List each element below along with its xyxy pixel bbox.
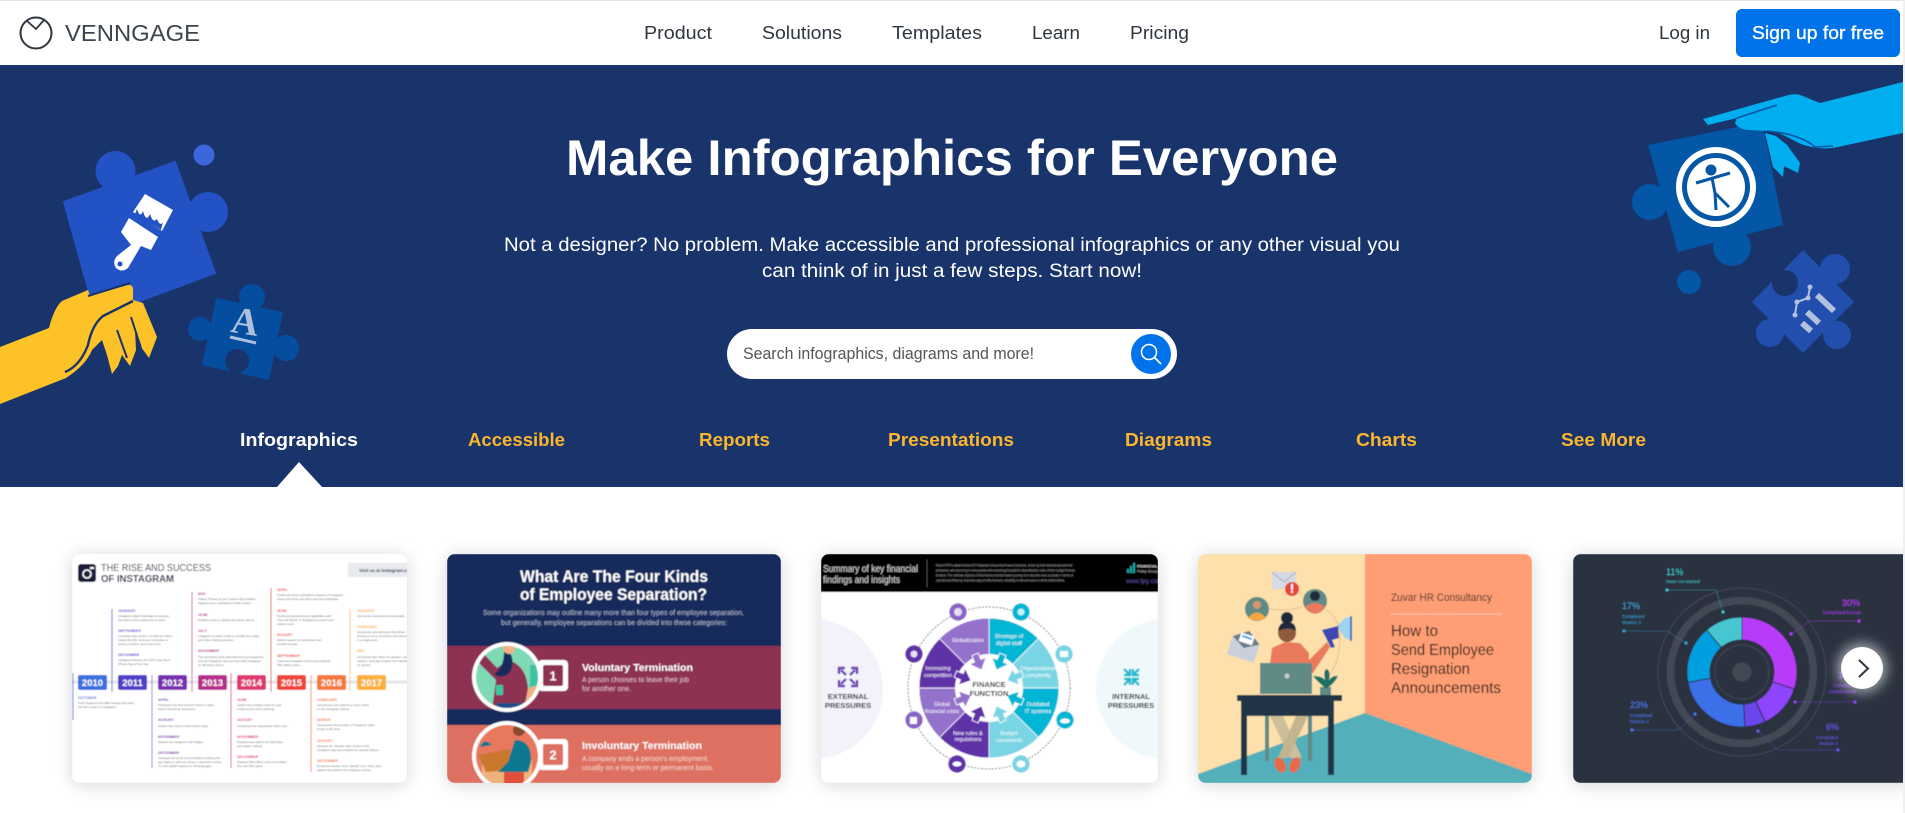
timeline events: MARCH	[317, 718, 331, 722]
internal pressures: INTERNAL	[1112, 692, 1150, 701]
band heading and text: usually on a long-term or permanent basis.	[582, 765, 714, 772]
hand: cyan	[1703, 82, 1903, 177]
finance wheel: FINANCE	[972, 680, 1006, 689]
card header: Summary of key financial	[823, 563, 918, 575]
timeline events: Announced new options to count views	[317, 703, 369, 707]
label: 17%	[1622, 601, 1688, 644]
category tabs: Reports	[699, 430, 770, 450]
left illustration: puzzle with brush and hand	[0, 144, 228, 404]
band heading and text: Voluntary Termination	[582, 662, 693, 674]
wheel labels: Global	[934, 702, 950, 708]
timeline events: portrait formats.	[277, 642, 298, 646]
sign up button: Sign up for free	[1752, 23, 1884, 43]
puzzle piece: letter A: A	[228, 299, 263, 345]
illustration: megaphone	[1322, 616, 1352, 648]
category tabs: Accessible	[468, 430, 565, 450]
puzzle piece: brush	[64, 144, 228, 317]
ring icons	[905, 603, 1074, 773]
timeline events: AUGUST	[277, 633, 293, 637]
card header: Policy Group	[1137, 570, 1158, 574]
label: 17%: 17%	[1622, 601, 1640, 611]
timeline events: JANUARY	[357, 609, 375, 613]
icon: arrows out	[839, 668, 857, 686]
category tabs	[240, 430, 1646, 450]
menu links: Product	[644, 23, 712, 43]
card text: Announcements	[1391, 680, 1501, 697]
wheel labels: digital staff	[996, 641, 1023, 647]
wheel labels: New rules &	[953, 731, 983, 737]
timeline events: explore tools.	[277, 622, 295, 626]
timeline events: instant tilt shift, improved resolution of	[118, 638, 168, 642]
timeline events: APRIL	[158, 698, 170, 702]
finance wheel: FUNCTION	[970, 689, 1008, 698]
card intro	[483, 610, 744, 627]
wheel labels: complexity	[1025, 673, 1051, 679]
timeline events: Enhanced stories more, started 'Live' users, and	[317, 764, 381, 768]
card header: pressures, are improving in many areas and exceeding forecast for diversification rates of their budget finance	[936, 568, 1075, 572]
timeline events: into the Instagram app and launched Instagram	[198, 659, 261, 663]
wheel labels: constraints	[996, 738, 1023, 744]
timeline events: Launched app version 2.0 with live filters,	[118, 634, 173, 638]
label: 6%: Completed	[1816, 735, 1838, 740]
search bar: Search infographics, diagrams and more!	[743, 345, 1034, 363]
timeline events: APRIL	[277, 588, 289, 592]
timeline events: length to 60 secs.	[317, 727, 341, 731]
band heading and text	[582, 740, 714, 772]
wheel labels: Outdated	[1027, 702, 1049, 708]
card header: Recent FPG's latest Global CFO Research shows that finance functions, driven by both internal and external	[936, 564, 1072, 568]
timeline events: and caption editing.	[237, 744, 263, 748]
illustration: person at desk	[1237, 612, 1342, 775]
label: 17%: Completed	[1622, 614, 1645, 619]
external pressures: EXTERNAL	[828, 692, 869, 701]
card title	[101, 563, 211, 585]
timeline events: NOVEMBER	[237, 735, 259, 739]
label: 6%: Module 1	[1819, 741, 1838, 746]
timeline events: before Facebook acquired it.	[158, 707, 196, 711]
timeline events: FEBRUARY	[317, 698, 338, 702]
label: 30%: 30%	[1842, 598, 1860, 608]
illustration: avatars and dashed links	[1245, 589, 1340, 675]
timeline years: 2010	[82, 678, 103, 689]
illustration: person with box	[471, 720, 540, 783]
number tag 2	[538, 739, 568, 770]
band heading and text: A company ends a person's employment,	[582, 756, 709, 763]
timeline events: MAY	[357, 649, 365, 653]
timeline events: added new stickers for Instagram stories.	[317, 768, 372, 772]
timeline events: Attained 300 million users and added	[237, 760, 287, 764]
timeline events: the first version of Instagram.	[78, 705, 117, 709]
sign up button	[1736, 9, 1900, 57]
search button	[1131, 334, 1171, 374]
card header: function. The ultimate objective of this finance transformation journey is to become more accurate in terms of	[936, 574, 1073, 578]
timeline events: Added support for landscape and	[277, 638, 322, 642]
category tabs: See More	[1561, 430, 1646, 450]
timeline events: 400 million users.	[277, 663, 301, 667]
external pressures: PRESSURES	[825, 701, 871, 710]
icon: accessibility	[1676, 147, 1756, 227]
label: 6%	[1756, 722, 1840, 752]
card header: www.fpg.com	[1125, 579, 1162, 585]
timeline events: JULY	[198, 629, 208, 633]
timeline years: 2015	[281, 678, 303, 689]
icon: arrows in	[1124, 669, 1139, 685]
timeline events: Live stories launched internationally.	[357, 614, 405, 618]
timeline events: FEBRUARY	[357, 625, 378, 629]
timeline events: Started the Instagram web widget.	[158, 740, 204, 744]
card title: THE RISE AND SUCCESS	[101, 563, 211, 574]
label: 23%: Completed	[1630, 713, 1653, 718]
category tabs: Charts	[1356, 430, 1417, 450]
timeline events: "See the World" in Singapore's search and	[277, 618, 334, 622]
wheel labels: competition	[924, 673, 952, 679]
timeline events: Introduced carousel post that allows	[357, 630, 405, 634]
wheel labels	[924, 634, 1056, 744]
timeline events: SEPTEMBER	[118, 629, 141, 633]
menu links: Templates	[892, 23, 982, 43]
wheel labels: Budget	[1000, 731, 1018, 737]
card header: findings and insights	[823, 574, 900, 586]
label: 30%: Completed Course	[1823, 610, 1861, 615]
timeline events: Introduced the first Android version 6 days	[158, 703, 215, 707]
puzzle piece: accessibility	[1632, 122, 1783, 294]
wheel labels: Organizational	[1020, 666, 1056, 672]
website tag: Visit us at instagram.com	[359, 568, 413, 573]
wheel labels: regulations	[955, 737, 982, 743]
timeline events: and video sharing process.	[198, 638, 234, 642]
timeline events: along with three new filters and long hashtags.	[277, 597, 339, 601]
hero subtitle	[504, 234, 1400, 282]
timeline events: AUGUST	[317, 739, 333, 743]
band heading and text: A person chooses to leave their job	[582, 677, 689, 684]
donut chart	[1658, 588, 1826, 756]
timeline events: 3.2 and added support for 25 languages.	[158, 764, 212, 768]
timeline events: five new filter types.	[237, 764, 264, 768]
timeline events: Adopted the 'Stories' slow motion in the	[317, 744, 370, 748]
hand: yellow	[0, 283, 157, 404]
card: Instagram timeline	[72, 554, 413, 783]
timeline events: AUGUST	[237, 718, 253, 722]
timeline events: DECEMBER	[237, 755, 258, 759]
card title	[520, 568, 708, 604]
right illustration: accessibility puzzle and hand	[1632, 82, 1903, 294]
wheel labels: Shortage of	[995, 634, 1024, 640]
card: donut chart dashboard	[1573, 554, 1905, 783]
timeline events: Instagram app and emptied its camera feature.	[317, 748, 379, 752]
timeline events: JANUARY	[118, 609, 136, 613]
timeline years: 2013	[202, 678, 223, 689]
timeline events: for Windows phone.	[198, 663, 225, 667]
timeline events	[78, 588, 411, 772]
card text: How to	[1391, 623, 1438, 640]
timeline events: Instagram became the iOS 5 App Store	[118, 658, 171, 662]
timeline years	[73, 588, 386, 772]
puzzle piece: chart	[1752, 250, 1854, 353]
timeline events: NOVEMBER	[198, 649, 220, 653]
logo	[20, 18, 200, 48]
menu links: Log in	[1659, 23, 1710, 43]
timeline events: Retrieved advertisement capabilities with	[277, 614, 332, 618]
hero subtitle: can think of in just a few steps. Start now!	[762, 260, 1142, 282]
illustration: bearded man	[471, 641, 540, 713]
timeline events: OCTOBER	[78, 696, 97, 700]
label: 14%: 14%	[1838, 670, 1856, 680]
number tag 1: 1	[549, 668, 557, 684]
timeline years: 2016	[321, 678, 342, 689]
label: 30%	[1790, 598, 1861, 636]
menu links	[644, 23, 1710, 43]
timeline events: Enabled users to upload and share videos.	[198, 618, 255, 622]
card header	[821, 554, 1162, 592]
card text: Zuvar HR Consultancy	[1391, 592, 1492, 604]
timeline events: Introduced face filters for glasses, new	[357, 655, 409, 659]
navigation bar	[20, 9, 1900, 57]
timeline events: NOVEMBER	[158, 735, 180, 739]
timeline events: stickers, and tags location and hashtags	[357, 659, 411, 663]
carousel next button	[1841, 647, 1883, 689]
hero subtitle: Not a designer? No problem. Make accessible and professional infographics or any other visual you	[504, 234, 1400, 256]
inward arrows	[953, 652, 1025, 724]
timeline events: JUNE	[198, 613, 208, 617]
label: 17%: Module 3	[1622, 620, 1641, 625]
timeline events: app rights to sell user photos. Launched version	[158, 760, 222, 764]
card intro: Some organizations may outline many more than four types of employee separation,	[483, 610, 744, 617]
label: 14%: Assessments	[1829, 689, 1857, 694]
timeline years: 2011	[122, 678, 144, 689]
timeline events: Improved Instagram direct and achieved	[277, 659, 331, 663]
wheel labels: IT systems	[1025, 709, 1051, 715]
timeline events: AUGUST	[158, 718, 174, 722]
illustration: envelopes and alert	[1227, 572, 1299, 663]
icon: instagram	[78, 564, 96, 582]
timeline events: tagging and a redesigned profile section.	[198, 601, 252, 605]
hero title: Make Infographics for Everyone	[566, 130, 1338, 186]
band: involuntary termination	[447, 720, 781, 783]
category tabs: Infographics	[240, 430, 358, 450]
finance wheel	[905, 603, 1074, 773]
timeline events: DECEMBER	[118, 653, 139, 657]
label: 14%	[1794, 670, 1857, 704]
timeline events: Cohort and their implications support of Instagram	[277, 593, 344, 597]
card: finance function diagram	[821, 554, 1158, 783]
menu links: Learn	[1032, 23, 1080, 43]
timeline events: JUNE	[237, 698, 247, 702]
wheel labels: financial crisis	[925, 709, 959, 715]
timeline events: JUNE	[277, 609, 287, 613]
timeline events: on the Instagram videos.	[317, 707, 350, 711]
timeline events: DECEMBER	[158, 751, 179, 755]
timeline events: Added new creative tools for post	[237, 703, 282, 707]
timeline years: 2017	[361, 678, 382, 689]
timeline events: the search and experience of users.	[118, 618, 166, 622]
timeline events: The sponsored post advertisement got integrated	[198, 655, 264, 659]
category tabs: Presentations	[888, 430, 1014, 450]
timeline events: SEPTEMBER	[277, 654, 300, 658]
timeline events: photos, borders, and a new icon.	[118, 642, 162, 646]
hero banner	[0, 65, 1903, 487]
label: 11%: Have not started	[1666, 579, 1700, 584]
search bar	[727, 329, 1177, 379]
timeline events: Added "Photos of you" feature that enabled	[198, 597, 256, 601]
timeline events: DECEMBER	[317, 759, 338, 763]
timeline events: Announced the increase of Instagram video	[317, 723, 375, 727]
wheel labels: Globalization	[952, 638, 984, 644]
website tag	[348, 563, 413, 577]
timeline events: Instagram added hashtags to enhance	[118, 614, 170, 618]
timeline events: sharing of up to 10 photos and videos	[357, 634, 408, 638]
internal pressures	[1096, 620, 1158, 758]
wheel labels: Increasing	[925, 666, 951, 672]
icon: paint brush	[114, 194, 173, 270]
card text: Send Employee	[1391, 642, 1494, 659]
timeline events: Enabled new options for title/video	[237, 740, 283, 744]
timeline events: Added map view to show photo maps.	[158, 724, 209, 728]
card title: What Are The Four Kinds	[520, 568, 708, 586]
label: 6%: 6%	[1826, 722, 1839, 732]
timeline events: Instagram embeds made to simplify the image	[198, 634, 260, 638]
category tabs: Diagrams	[1125, 430, 1212, 450]
band heading and text: for another one.	[582, 686, 631, 693]
timeline events: Introduced the Hyperlapse video post.	[237, 724, 288, 728]
card header: FINANCIAL	[1137, 564, 1158, 568]
card: employee separation	[447, 554, 781, 795]
active tab pointer	[277, 462, 322, 487]
number tag 2: 2	[549, 748, 557, 762]
card title: of Employee Separation?	[520, 586, 707, 604]
band: voluntary termination	[447, 640, 781, 715]
label: 14%: Completed	[1834, 683, 1856, 688]
timeline events: enhancement and colouring.	[237, 707, 275, 711]
band heading and text	[582, 662, 693, 693]
band heading and text: Involuntary Termination	[582, 740, 702, 752]
timeline events: Kevin Systrom and Mike Krieger launched	[78, 701, 134, 705]
label: 23%	[1630, 700, 1696, 732]
card text	[1391, 592, 1503, 697]
timeline events: Changed the terms and conditions granting the	[158, 756, 221, 760]
menu links: Solutions	[762, 23, 842, 43]
card intro: but generally, employee separations can be divided into these categories:	[501, 620, 727, 627]
timeline events: for stories.	[357, 663, 371, 667]
logo: VENNGAGE	[65, 20, 200, 46]
label: 23%: 23%	[1630, 700, 1648, 710]
puzzle piece: letter A	[188, 284, 299, 380]
card text: Resignation	[1391, 661, 1470, 678]
internal pressures: PRESSURES	[1108, 701, 1154, 710]
menu links: Pricing	[1130, 23, 1189, 43]
card title: OF INSTAGRAM	[101, 574, 174, 585]
number tag 1	[538, 660, 568, 691]
label: 23%: Module 3	[1630, 719, 1649, 724]
timeline years: 2014	[241, 678, 263, 689]
timeline events: iPhone App of the Year.	[118, 662, 149, 666]
label: 11%	[1666, 567, 1724, 614]
timeline years: 2012	[162, 678, 183, 689]
card: resignation announcements	[1198, 554, 1532, 783]
card header: operational efficiency, business support effectiveness, reliability in talk and value to all its stakeholders.	[936, 578, 1065, 582]
external pressures	[822, 620, 883, 758]
timeline events: in a single post.	[357, 638, 378, 642]
timeline events: MAY	[198, 592, 206, 596]
label: 11%: 11%	[1666, 567, 1683, 577]
